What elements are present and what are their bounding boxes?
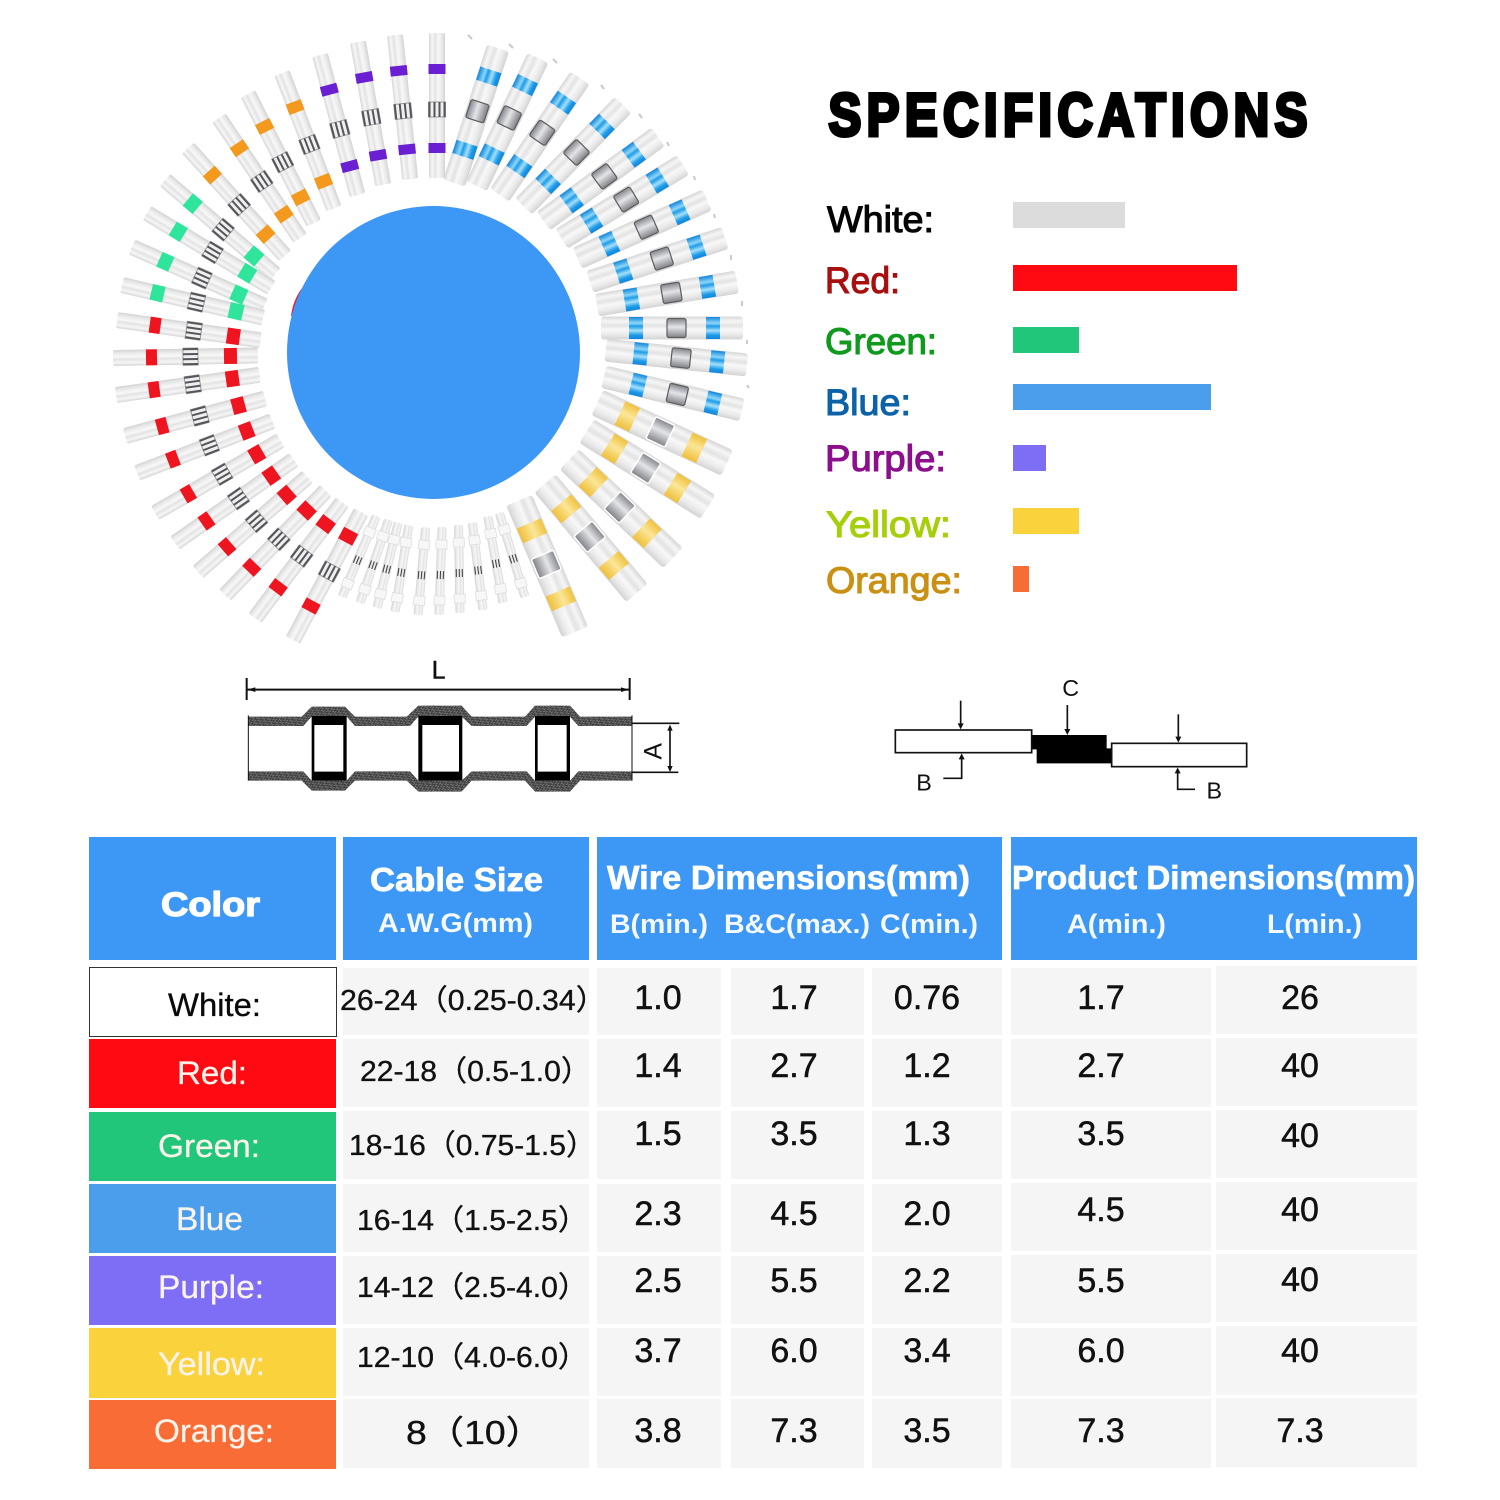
row: yellow <box>89 1326 1417 1398</box>
row: orange: 8（10） <box>406 1414 543 1451</box>
row: red: Red: <box>177 1055 247 1091</box>
specification table <box>89 837 1417 1469</box>
row: orange: 3.5 <box>903 1412 951 1450</box>
tube end lines <box>248 715 632 781</box>
legend row: red <box>825 260 1237 301</box>
legend row: purple <box>825 438 1046 479</box>
row: green: Green: <box>158 1128 260 1164</box>
row: purple: 5.5 <box>770 1262 818 1300</box>
label B left: B <box>916 770 932 796</box>
legend row: green <box>825 321 1079 362</box>
row: white: White: <box>168 987 261 1023</box>
red connectors <box>113 312 369 644</box>
yellow connectors <box>506 390 733 637</box>
row: green: 1.3 <box>903 1115 951 1153</box>
row: yellow: 3.7 <box>634 1332 682 1370</box>
legend row: purple: Purple: <box>825 438 946 479</box>
row: red: 1.4 <box>634 1047 682 1085</box>
row: blue: Blue <box>176 1201 243 1237</box>
row: blue: 40 <box>1281 1191 1319 1229</box>
legend row: blue <box>825 382 1211 423</box>
row: blue: 4.5 <box>1077 1191 1125 1229</box>
legend row: orange: Orange: <box>826 560 962 601</box>
dimension L: L <box>432 657 446 684</box>
row: yellow: Yellow: <box>158 1346 265 1382</box>
legend row: yellow <box>826 504 1079 545</box>
crimp band right <box>535 716 570 781</box>
crimp band middle <box>418 716 462 781</box>
row: blue <box>89 1182 1417 1253</box>
row: purple: 5.5 <box>1077 1262 1125 1300</box>
dimension A <box>632 723 679 772</box>
small plastic offcuts beside blue connectors <box>468 35 749 388</box>
row: purple: 2.2 <box>903 1262 951 1300</box>
bottom wall <box>248 771 632 792</box>
row: green: 3.5 <box>770 1115 818 1153</box>
row: red: 22-18（0.5-1.0） <box>360 1056 591 1088</box>
header: wire dimensions: B&C(max.) <box>724 909 870 939</box>
blue central circle <box>287 206 580 499</box>
row: white: 1.0 <box>634 979 682 1017</box>
header: product dimensions <box>1011 837 1417 960</box>
wire dimension diagram <box>895 675 1247 803</box>
row: orange <box>89 1398 1417 1469</box>
row: blue: 2.0 <box>903 1195 951 1233</box>
legend row: white <box>827 199 1125 240</box>
row: purple <box>89 1254 1417 1325</box>
row: red: 2.7 <box>1077 1047 1125 1085</box>
row: yellow: 12-10（4.0-6.0） <box>357 1342 588 1374</box>
header: wire dimensions: B(min.) <box>610 909 708 939</box>
legend row: red: Red: <box>825 260 900 301</box>
row: purple: 14-12（2.5-4.0） <box>357 1272 588 1304</box>
row: orange: Orange: <box>154 1413 274 1449</box>
green connectors <box>120 174 281 326</box>
photo: wheel of solder seal connectors around a blue circle <box>113 33 749 644</box>
legend row: green: Green: <box>825 321 937 362</box>
header: product dimensions: A(min.) <box>1067 909 1166 939</box>
row: white: 26-24（0.25-0.34） <box>340 985 606 1017</box>
orange connectors <box>182 70 342 261</box>
row: white: 1.7 <box>1077 979 1125 1017</box>
colour legend <box>825 199 1237 601</box>
row: blue: 2.3 <box>634 1195 682 1233</box>
header: cable size: Cable Size <box>370 861 543 898</box>
row: white: 26 <box>1281 979 1319 1017</box>
row: blue: 4.5 <box>770 1195 818 1233</box>
header: cable size <box>343 837 589 960</box>
header: wire dimensions <box>597 837 1002 960</box>
dimension A: A <box>640 743 667 760</box>
row: red: 2.7 <box>770 1047 818 1085</box>
row: orange: 3.8 <box>634 1412 682 1450</box>
top wall <box>248 706 632 726</box>
red sliver at circle edge <box>291 288 302 316</box>
row: yellow: 6.0 <box>770 1332 818 1370</box>
header: color <box>89 837 336 960</box>
row: orange: 7.3 <box>1077 1412 1125 1450</box>
blue connectors <box>443 44 748 421</box>
row: orange: 7.3 <box>1276 1412 1324 1450</box>
header: cable size: A.W.G(mm) <box>378 908 533 938</box>
right wire <box>1112 743 1247 767</box>
row: green <box>89 1110 1417 1181</box>
row: green: 18-16（0.75-1.5） <box>349 1130 596 1162</box>
row: yellow: 40 <box>1281 1332 1319 1370</box>
connector cross-section diagram <box>247 657 679 792</box>
label C: C <box>1062 675 1079 701</box>
white connectors <box>337 511 530 615</box>
row: purple: 40 <box>1281 1261 1319 1299</box>
header: wire dimensions: C(min.) <box>880 909 978 939</box>
row: yellow: 3.4 <box>903 1332 951 1370</box>
header: color: Color <box>161 886 260 924</box>
header: product dimensions: Product Dimensions(mm) <box>1012 859 1415 896</box>
left wire <box>895 730 1032 753</box>
dimension L <box>247 657 630 700</box>
row: orange: 7.3 <box>770 1412 818 1450</box>
row: red: 40 <box>1281 1047 1319 1085</box>
title: SPECIFICATIONS <box>828 81 1307 149</box>
legend row: orange <box>826 560 1029 601</box>
header: wire dimensions: Wire Dimensions(mm) <box>607 859 970 896</box>
row: green: 40 <box>1281 1117 1319 1155</box>
wire core C <box>1032 735 1112 763</box>
row: white <box>90 966 1417 1036</box>
row: red <box>89 1038 1417 1108</box>
row: white: 0.76 <box>894 979 960 1017</box>
legend row: yellow: Yellow: <box>826 504 951 545</box>
label B right: B <box>1207 777 1222 803</box>
legend row: blue: Blue: <box>825 382 911 423</box>
row: yellow: 6.0 <box>1077 1332 1125 1370</box>
row: white: 1.7 <box>770 979 818 1017</box>
arrows and callouts <box>943 701 1195 789</box>
legend row: white: White: <box>827 199 934 240</box>
row: blue: 16-14（1.5-2.5） <box>357 1205 588 1237</box>
purple connectors <box>312 33 446 197</box>
row: purple: 2.5 <box>634 1262 682 1300</box>
header: product dimensions: L(min.) <box>1267 909 1362 939</box>
row: red: 1.2 <box>903 1047 951 1085</box>
crimp band left <box>312 716 347 781</box>
row: purple: Purple: <box>158 1269 264 1305</box>
row: green: 3.5 <box>1077 1115 1125 1153</box>
row: green: 1.5 <box>634 1115 682 1153</box>
